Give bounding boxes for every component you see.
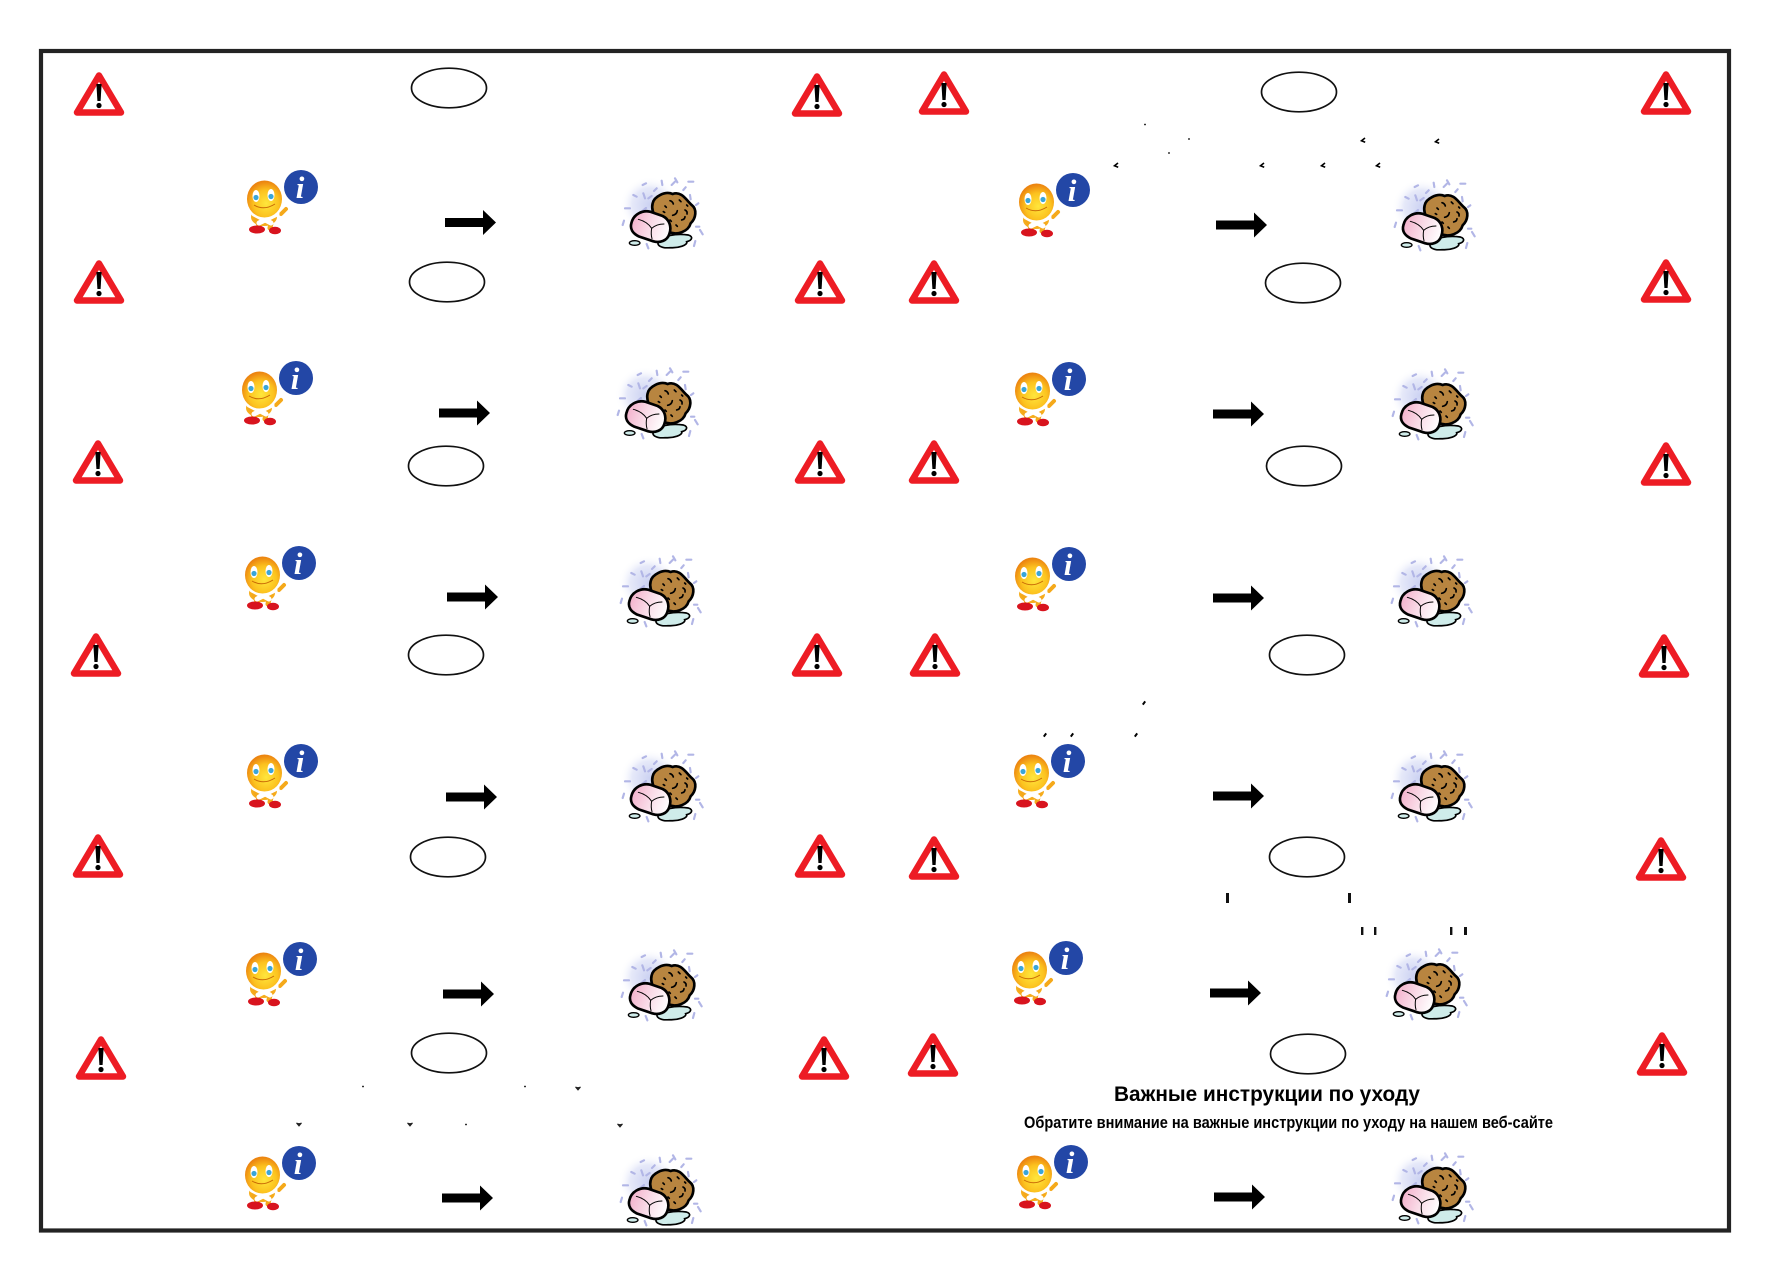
icon: soap and sponge (1384, 948, 1467, 1019)
arrow (446, 784, 497, 810)
icon: soap and sponge (1392, 179, 1475, 250)
mascot with info icon (245, 1146, 316, 1210)
icon: soap and sponge (1390, 368, 1473, 439)
mascot with info icon (242, 361, 313, 425)
heading: Важные инструкции по уходу (1114, 1083, 1420, 1106)
subheading: Обратите внимание на важные инструкции по уходу на нашем веб-сайте (1024, 1113, 1553, 1132)
arrow (442, 1186, 493, 1210)
mascot with info icon (245, 546, 316, 610)
arrow (1210, 980, 1261, 1006)
warning icon (795, 636, 839, 674)
empty oval (410, 262, 484, 302)
mascot with info icon (1015, 362, 1086, 426)
warning icon (912, 264, 956, 300)
stray text marks: middle right (1044, 701, 1145, 737)
empty oval (410, 837, 486, 877)
warning icon (798, 838, 842, 874)
mascot with info icon (247, 170, 318, 234)
panel: care block left 2 (77, 262, 842, 438)
warning icon (77, 76, 121, 112)
arrow (1216, 212, 1267, 238)
icon: soap and sponge (1390, 1152, 1473, 1223)
warning icon (795, 76, 839, 114)
warning icon (1644, 446, 1688, 482)
mascot with info icon (1014, 744, 1085, 808)
warning icon (798, 444, 842, 480)
panel: care block right 5 (912, 837, 1683, 1019)
mascot with info icon (247, 744, 318, 808)
warning icon (798, 264, 842, 300)
empty oval (1266, 263, 1340, 303)
arrow (1213, 784, 1264, 808)
arrow (1214, 1184, 1265, 1210)
empty oval (412, 68, 486, 108)
arrow (445, 210, 496, 235)
warning icon (1644, 74, 1688, 112)
panel: care block right 1 (922, 72, 1688, 250)
stray text marks: top right (1114, 124, 1439, 167)
warning icon (912, 444, 956, 480)
panel: care block left 1 (77, 68, 839, 248)
empty oval (1270, 837, 1344, 877)
arrow (447, 584, 498, 610)
icon: soap and sponge (619, 949, 702, 1020)
stray text marks: bottom left (296, 1086, 622, 1127)
empty oval (1270, 1034, 1346, 1074)
icon: soap and sponge (618, 555, 701, 626)
panel: care block left 3 (76, 444, 842, 626)
panel: care block right 4 (913, 635, 1686, 821)
warning icon (1642, 638, 1686, 674)
arrow (1213, 402, 1264, 426)
mascot with info icon (1012, 941, 1083, 1005)
warning icon (1640, 1036, 1684, 1072)
panel: care block left 5 (76, 837, 842, 1020)
arrow (439, 400, 490, 426)
panel: care block left 4 (74, 635, 839, 821)
warning icon (79, 1040, 123, 1076)
panel: care block right 3 (912, 444, 1688, 626)
empty oval (412, 1033, 486, 1073)
panel: care block right 6 (911, 1034, 1684, 1223)
warning icon (922, 74, 966, 112)
icon: soap and sponge (620, 750, 703, 821)
arrow (1213, 586, 1264, 610)
warning icon (913, 636, 957, 674)
warning icon (1639, 840, 1683, 878)
mascot with info icon (246, 942, 317, 1006)
icon: soap and sponge (618, 1154, 701, 1225)
warning icon (76, 444, 120, 480)
icon: soap and sponge (615, 367, 698, 438)
warning icon (912, 840, 956, 876)
warning icon (802, 1040, 846, 1076)
icon: soap and sponge (1389, 750, 1472, 821)
stray text ticks: lower right (1226, 893, 1467, 935)
warning icon (911, 1036, 955, 1074)
empty oval (1270, 635, 1344, 675)
warning icon (74, 636, 118, 674)
warning icon (77, 264, 121, 300)
empty oval (408, 635, 484, 675)
warning icon (76, 838, 120, 874)
empty oval (1262, 72, 1336, 112)
panel: care block left 6 (79, 1033, 846, 1225)
mascot with info icon (1017, 1145, 1088, 1209)
icon: soap and sponge (1389, 555, 1472, 626)
warning icon (1644, 262, 1688, 300)
empty oval (1266, 446, 1342, 486)
mascot with info icon (1015, 547, 1086, 611)
panel: care block right 2 (912, 262, 1688, 439)
empty oval (408, 446, 484, 486)
icon: soap and sponge (620, 177, 703, 248)
mascot with info icon (1019, 173, 1090, 237)
arrow (443, 982, 494, 1006)
